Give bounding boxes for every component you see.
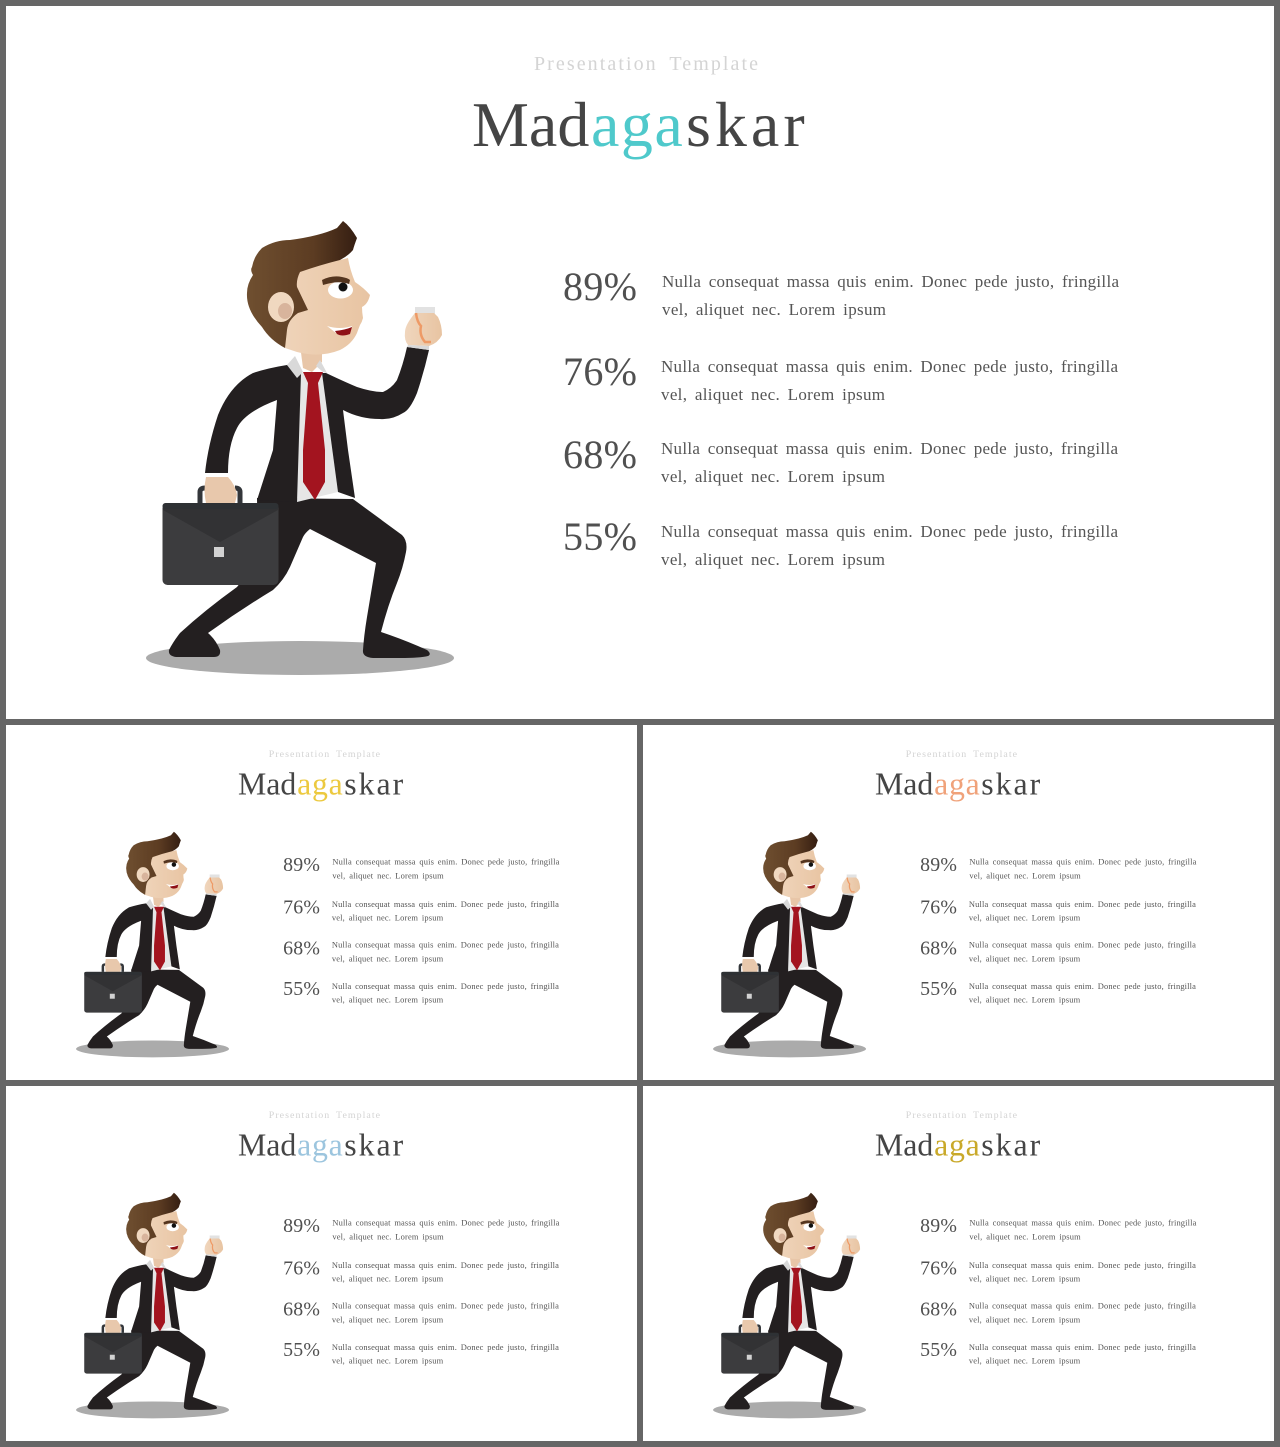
stat 76% bbox=[283, 1257, 559, 1284]
stat 89%: vel, aliquet nec. Lorem ipsum bbox=[332, 870, 444, 880]
stat 68%: 68% bbox=[920, 1299, 957, 1321]
stat 55%: vel, aliquet nec. Lorem ipsum bbox=[661, 550, 885, 569]
title: skar bbox=[981, 1128, 1042, 1163]
stat 89% bbox=[283, 854, 560, 880]
stat 76%: vel, aliquet nec. Lorem ipsum bbox=[969, 913, 1081, 923]
stat 89%: 89% bbox=[283, 1215, 320, 1237]
stat 68%: vel, aliquet nec. Lorem ipsum bbox=[969, 953, 1081, 963]
panel: main slide bbox=[6, 6, 1274, 719]
stat 89%: vel, aliquet nec. Lorem ipsum bbox=[969, 870, 1081, 880]
stat 76% bbox=[920, 1257, 1196, 1284]
stat 55%: vel, aliquet nec. Lorem ipsum bbox=[332, 995, 444, 1005]
stat 68%: Nulla consequat massa quis enim. Donec pede justo, fringilla bbox=[332, 1301, 559, 1311]
stat 55% bbox=[563, 514, 1118, 569]
stat 68%: 68% bbox=[563, 432, 637, 477]
stat 89%: Nulla consequat massa quis enim. Donec pede justo, fringilla bbox=[332, 1218, 560, 1228]
stat 76%: 76% bbox=[283, 896, 320, 918]
stat 55%: 55% bbox=[920, 1339, 957, 1361]
stat 76%: vel, aliquet nec. Lorem ipsum bbox=[332, 1274, 444, 1284]
businessman illustration bbox=[146, 221, 454, 675]
stat 68%: 68% bbox=[283, 1299, 320, 1321]
stat 68% bbox=[283, 1299, 559, 1324]
stat 89%: 89% bbox=[920, 854, 957, 876]
stat 76% bbox=[563, 349, 1118, 404]
stat 76%: Nulla consequat massa quis enim. Donec pede justo, fringilla bbox=[332, 1260, 559, 1270]
panel: yellow variant bbox=[6, 725, 637, 1080]
panel: blue variant bbox=[6, 1086, 637, 1441]
title: aga bbox=[297, 767, 343, 802]
stat 89%: vel, aliquet nec. Lorem ipsum bbox=[332, 1231, 444, 1241]
title: skar bbox=[686, 89, 809, 160]
stat 68%: Nulla consequat massa quis enim. Donec pede justo, fringilla bbox=[969, 940, 1196, 950]
panel: gold variant bbox=[643, 1086, 1274, 1441]
stat 89%: Nulla consequat massa quis enim. Donec pede justo, fringilla bbox=[332, 857, 560, 867]
title: Mad bbox=[875, 1128, 933, 1163]
stat 55% bbox=[920, 978, 1196, 1005]
stat 55%: vel, aliquet nec. Lorem ipsum bbox=[969, 1356, 1081, 1366]
stat 55%: Nulla consequat massa quis enim. Donec pede justo, fringilla bbox=[332, 1342, 559, 1352]
stat 68%: Nulla consequat massa quis enim. Donec pede justo, fringilla bbox=[661, 439, 1118, 458]
panel: orange variant bbox=[643, 725, 1274, 1080]
stat 68%: Nulla consequat massa quis enim. Donec pede justo, fringilla bbox=[969, 1301, 1196, 1311]
stat 55%: 55% bbox=[920, 978, 957, 1000]
stat 55%: 55% bbox=[283, 1339, 320, 1361]
stat 68% bbox=[920, 1299, 1196, 1324]
title: aga bbox=[297, 1128, 343, 1163]
stat 68% bbox=[920, 938, 1196, 963]
stat 68% bbox=[563, 432, 1118, 486]
stat 89% bbox=[920, 854, 1197, 880]
stat 76% bbox=[283, 896, 559, 923]
stat 89%: 89% bbox=[283, 854, 320, 876]
stat 89%: Nulla consequat massa quis enim. Donec pede justo, fringilla bbox=[969, 857, 1197, 867]
stat 76%: Nulla consequat massa quis enim. Donec pede justo, fringilla bbox=[661, 357, 1118, 376]
subtitle: Presentation Template bbox=[269, 749, 381, 760]
title: Mad bbox=[472, 89, 589, 160]
stat 68%: vel, aliquet nec. Lorem ipsum bbox=[969, 1314, 1081, 1324]
title: Mad bbox=[238, 1128, 296, 1163]
title: aga bbox=[934, 1128, 980, 1163]
stat 68%: Nulla consequat massa quis enim. Donec pede justo, fringilla bbox=[332, 940, 559, 950]
title: Mad bbox=[875, 767, 933, 802]
stat 55%: Nulla consequat massa quis enim. Donec pede justo, fringilla bbox=[661, 522, 1118, 541]
stat 76%: vel, aliquet nec. Lorem ipsum bbox=[661, 385, 885, 404]
stat 55%: Nulla consequat massa quis enim. Donec pede justo, fringilla bbox=[969, 981, 1196, 991]
stat 76%: Nulla consequat massa quis enim. Donec pede justo, fringilla bbox=[969, 899, 1196, 909]
businessman illustration bbox=[713, 832, 866, 1057]
stat 76%: 76% bbox=[920, 1257, 957, 1279]
stat 89%: 89% bbox=[920, 1215, 957, 1237]
title: skar bbox=[344, 767, 405, 802]
subtitle: Presentation Template bbox=[269, 1110, 381, 1121]
stat 89%: Nulla consequat massa quis enim. Donec pede justo, fringilla bbox=[969, 1218, 1197, 1228]
stat 68%: 68% bbox=[920, 938, 957, 960]
stat 89%: vel, aliquet nec. Lorem ipsum bbox=[662, 300, 886, 319]
title: aga bbox=[934, 767, 980, 802]
stat 76%: vel, aliquet nec. Lorem ipsum bbox=[969, 1274, 1081, 1284]
stat 55% bbox=[920, 1339, 1196, 1366]
stat 55% bbox=[283, 978, 559, 1005]
stat 76%: 76% bbox=[920, 896, 957, 918]
stat 89%: Nulla consequat massa quis enim. Donec pede justo, fringilla bbox=[662, 272, 1119, 291]
stat 89% bbox=[563, 264, 1119, 319]
stat 89%: 89% bbox=[563, 264, 637, 309]
stat 76%: vel, aliquet nec. Lorem ipsum bbox=[332, 913, 444, 923]
stat 55%: Nulla consequat massa quis enim. Donec pede justo, fringilla bbox=[969, 1342, 1196, 1352]
stat 76%: 76% bbox=[283, 1257, 320, 1279]
businessman illustration bbox=[713, 1193, 866, 1418]
stat 76%: Nulla consequat massa quis enim. Donec pede justo, fringilla bbox=[332, 899, 559, 909]
stat 68%: vel, aliquet nec. Lorem ipsum bbox=[332, 1314, 444, 1324]
stat 55%: 55% bbox=[283, 978, 320, 1000]
stat 55%: Nulla consequat massa quis enim. Donec pede justo, fringilla bbox=[332, 981, 559, 991]
stat 76% bbox=[920, 896, 1196, 923]
stat 76%: 76% bbox=[563, 349, 637, 394]
stat 55%: 55% bbox=[563, 514, 637, 559]
subtitle: Presentation Template bbox=[906, 1110, 1018, 1121]
businessman illustration bbox=[76, 832, 229, 1057]
businessman illustration bbox=[76, 1193, 229, 1418]
stat 89% bbox=[283, 1215, 560, 1241]
title: skar bbox=[981, 767, 1042, 802]
stat 89% bbox=[920, 1215, 1197, 1241]
subtitle: Presentation Template bbox=[534, 53, 758, 75]
title: Mad bbox=[238, 767, 296, 802]
subtitle: Presentation Template bbox=[906, 749, 1018, 760]
stat 55% bbox=[283, 1339, 559, 1366]
stat 76%: Nulla consequat massa quis enim. Donec pede justo, fringilla bbox=[969, 1260, 1196, 1270]
stat 68%: 68% bbox=[283, 938, 320, 960]
stat 68% bbox=[283, 938, 559, 963]
title: skar bbox=[344, 1128, 405, 1163]
stat 55%: vel, aliquet nec. Lorem ipsum bbox=[332, 1356, 444, 1366]
stat 55%: vel, aliquet nec. Lorem ipsum bbox=[969, 995, 1081, 1005]
stat 68%: vel, aliquet nec. Lorem ipsum bbox=[332, 953, 444, 963]
stat 68%: vel, aliquet nec. Lorem ipsum bbox=[661, 467, 885, 486]
title: aga bbox=[591, 89, 684, 160]
stat 89%: vel, aliquet nec. Lorem ipsum bbox=[969, 1231, 1081, 1241]
